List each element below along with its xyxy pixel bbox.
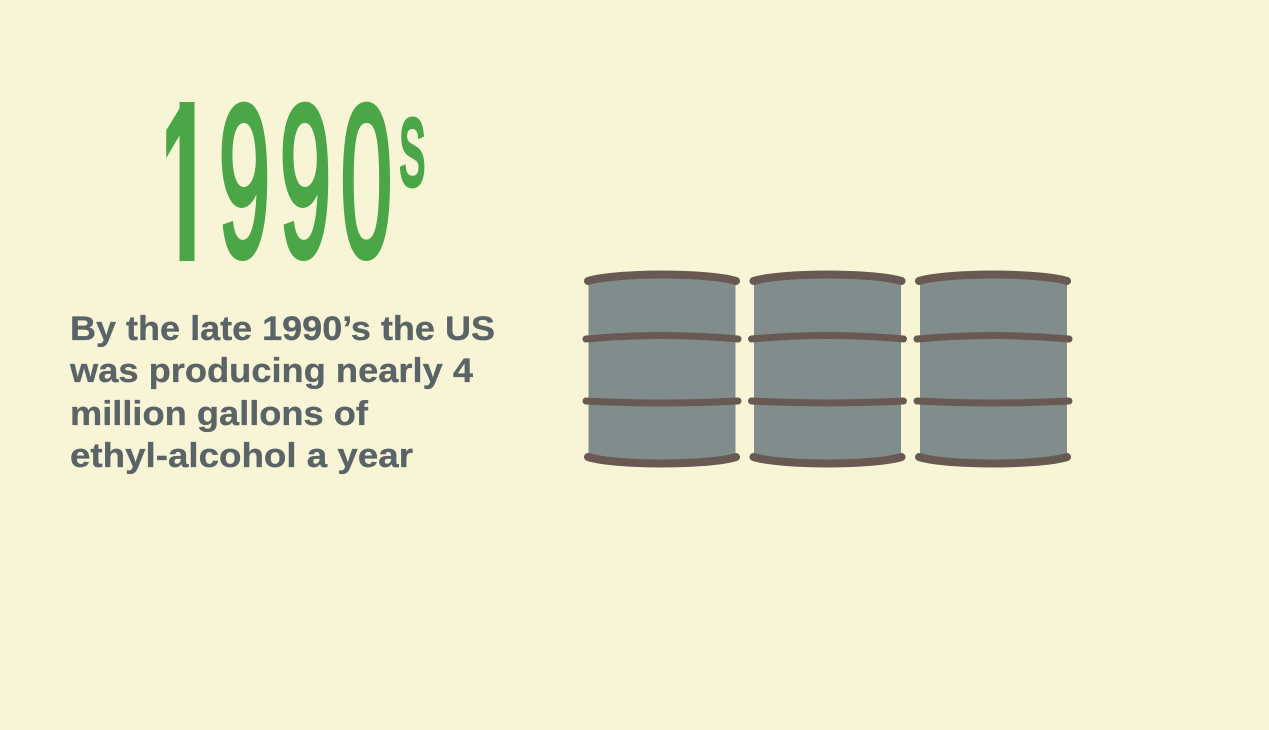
title: 1990s: S — [400, 102, 425, 205]
icon: barrel 2 — [752, 274, 904, 464]
title: 1990s: 1 — [159, 60, 210, 306]
title: 1990s: 9 — [218, 61, 270, 303]
title: 1990s: 9 — [280, 61, 331, 303]
title: 1990s: 0 — [340, 61, 392, 303]
text block: description: ethyl-alcohol a year — [70, 437, 413, 475]
text block: description — [69, 310, 495, 475]
text block: description: million gallons of — [70, 395, 369, 433]
icon: barrel 1 — [586, 274, 738, 464]
icon: barrel 3 — [917, 274, 1069, 464]
text block: description: was producing nearly 4 — [69, 352, 473, 390]
text block: description: By the late 1990’s the US — [70, 310, 495, 348]
title: 1990s — [166, 102, 424, 261]
